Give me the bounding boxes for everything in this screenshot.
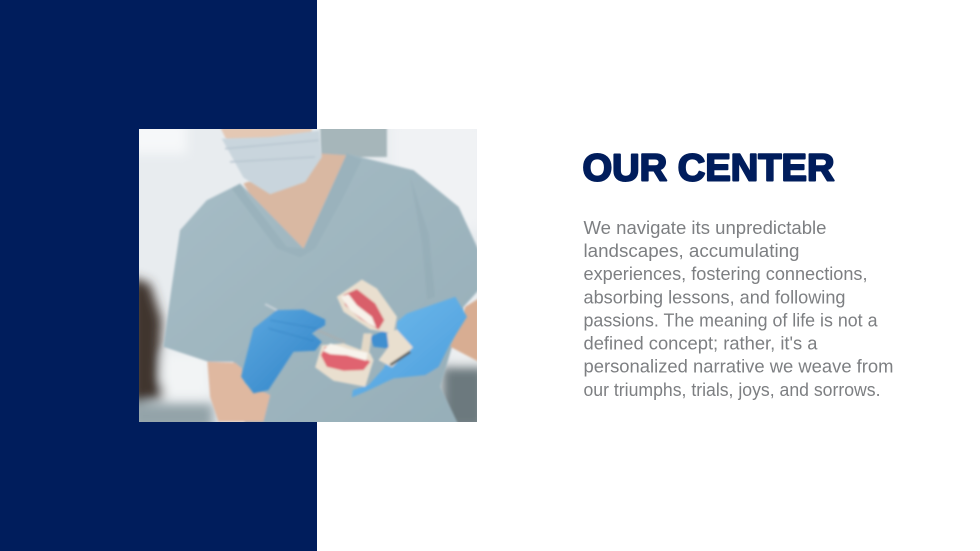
body text block: our triumphs, trials, joys, and sorrows. xyxy=(584,380,880,400)
body text block: personalized narrative we weave from xyxy=(584,356,894,376)
body text block xyxy=(584,218,894,400)
denture hinge xyxy=(360,333,372,357)
body text block: absorbing lessons, and following xyxy=(584,288,846,308)
scrubs xyxy=(163,154,479,425)
photo: dentist holding a denture model xyxy=(139,129,477,422)
body text block: We navigate its unpredictable xyxy=(584,218,826,238)
title: OUR CENTER xyxy=(582,148,834,190)
panel: navy left band xyxy=(0,0,317,551)
body text block: passions. The meaning of life is not a xyxy=(584,310,878,330)
right glove xyxy=(352,297,467,397)
body text block: landscapes, accumulating xyxy=(584,241,800,261)
left glove xyxy=(241,309,325,393)
lower jaw xyxy=(315,343,374,387)
skin: forehead and neck xyxy=(220,127,312,140)
body text block: experiences, fostering connections, xyxy=(584,264,868,284)
upper jaw xyxy=(337,279,397,333)
mask xyxy=(222,130,322,194)
arms xyxy=(207,362,270,422)
body text block: defined concept; rather, it's a xyxy=(584,334,818,354)
instrument xyxy=(265,304,277,310)
